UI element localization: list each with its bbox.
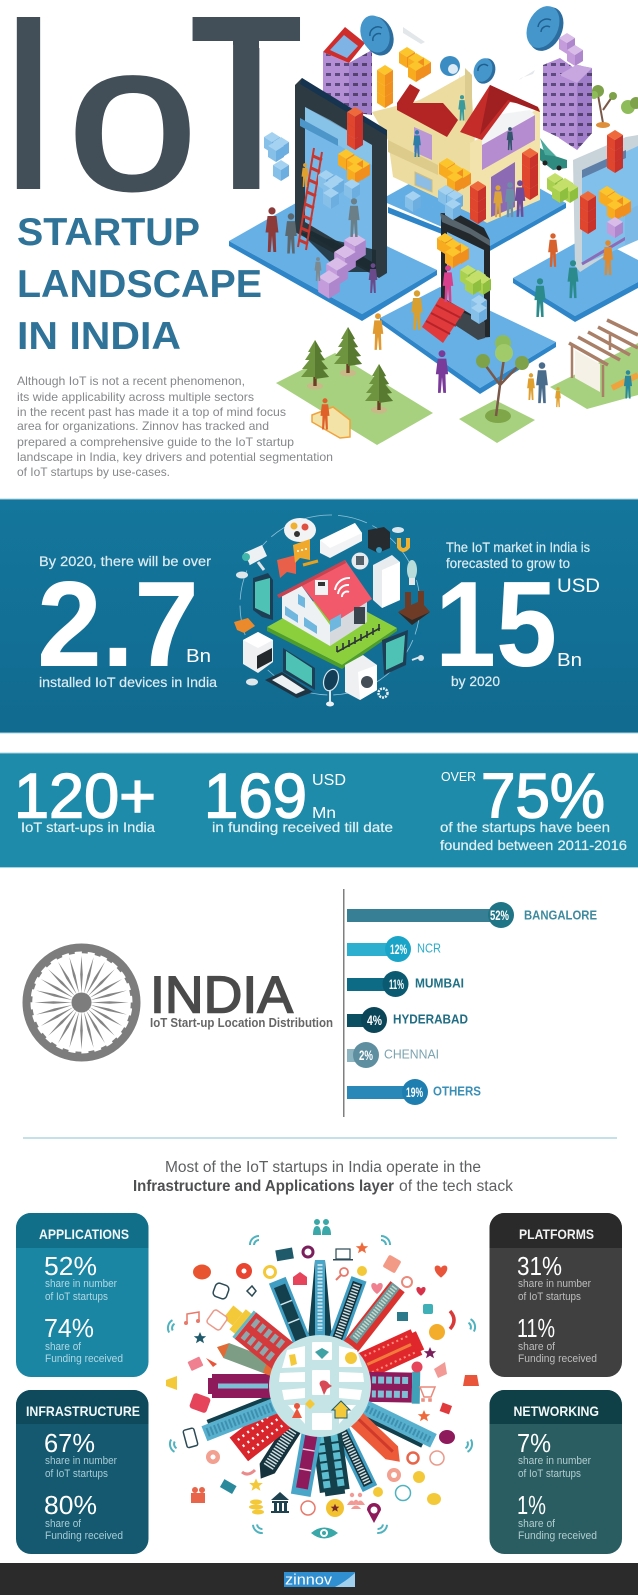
heading: tech stack layers: Infrastructure and Applications layer — [133, 1178, 394, 1195]
stat: 169 USD Mn: in funding received till date — [212, 819, 393, 835]
red ladder — [298, 148, 322, 250]
intro paragraph: landscape in India, key drivers and potential segmentation — [17, 450, 333, 464]
bench — [312, 407, 350, 438]
zinnov logo — [284, 1572, 355, 1588]
house — [277, 560, 380, 652]
panel: platforms: PLATFORMS — [519, 1226, 594, 1242]
intro paragraph — [17, 374, 333, 479]
bar: Others 19%: OTHERS — [433, 1084, 481, 1098]
panel: applications: 52% — [44, 1251, 97, 1281]
panel: applications: share in number — [45, 1278, 117, 1290]
bar: Chennai 2% — [347, 1042, 439, 1068]
bar: NCR 12%: 12% — [390, 941, 407, 957]
right screen — [573, 135, 638, 272]
bar: Mumbai 11%: 11% — [389, 976, 404, 992]
subtitle: startup landscape in India: IN INDIA — [17, 315, 181, 358]
icon: smart home with devices — [234, 515, 430, 706]
chart: location distribution bars — [343, 889, 597, 1117]
stat: over 75%: 75% — [481, 762, 605, 832]
subtitle: startup landscape in India: LANDSCAPE — [17, 263, 262, 306]
orbiting icons — [166, 1219, 479, 1538]
bar: Mumbai 11% — [347, 971, 464, 997]
bar: Bangalore 52%: 52% — [490, 907, 509, 923]
stat: 15 USD Bn market: forecasted to grow to — [446, 556, 570, 571]
teal car — [540, 138, 567, 170]
panel: networking: NETWORKING — [514, 1403, 599, 1419]
intro paragraph: Although IoT is not a recent phenomenon, — [17, 374, 245, 388]
yellow blocks — [338, 47, 631, 268]
panel: platforms: of IoT startups — [518, 1291, 581, 1303]
stat: 169 USD Mn: 169 — [204, 762, 307, 832]
subtitle: startup landscape in India — [17, 211, 262, 358]
bar: Hyderabad 4%: 4% — [367, 1012, 382, 1028]
stat: 2.7 Bn devices: 2.7 — [37, 556, 199, 692]
panel: applications — [16, 1213, 148, 1377]
stat: 120+: 120+ — [14, 762, 156, 832]
bar: Bangalore 52% — [347, 902, 597, 928]
panel: networking: 7% — [517, 1428, 551, 1458]
stat: over 75%: OVER — [441, 769, 476, 784]
panel: platforms: Funding received — [518, 1353, 597, 1365]
panel: applications: APPLICATIONS — [39, 1226, 129, 1242]
heading: India location distribution: IoT Start-up Location Distribution — [150, 1015, 333, 1030]
panel: applications: share of — [45, 1341, 82, 1353]
radial city illustration — [166, 1219, 479, 1538]
red columns — [347, 107, 623, 234]
stat: 2.7 Bn devices: Bn — [186, 646, 211, 666]
bar: NCR 12%: NCR — [417, 942, 441, 956]
bar: Hyderabad 4% — [347, 1007, 468, 1033]
bar: NCR 12% — [347, 936, 441, 962]
small trees top right — [590, 85, 638, 128]
heading: India location distribution: INDIA — [150, 966, 293, 1024]
panel: market stats band — [0, 498, 638, 734]
green blocks — [460, 173, 578, 295]
heading: tech stack layers: of the tech stack — [399, 1178, 513, 1195]
panel: platforms: 11% — [517, 1313, 555, 1343]
pine trees — [301, 327, 393, 414]
blue blocks — [264, 132, 623, 324]
bar: Others 19% — [347, 1079, 481, 1105]
panel: infrastructure: INFRASTRUCTURE — [26, 1403, 140, 1419]
heading: tech stack layers — [133, 1159, 513, 1195]
panel: networking: share in number — [518, 1455, 591, 1467]
left tablet — [295, 78, 387, 278]
panel: networking: 1% — [517, 1490, 546, 1520]
bar: Chennai 2%: 2% — [359, 1047, 373, 1063]
stat: 15 USD Bn market: 15 — [435, 556, 557, 692]
bar: Hyderabad 4%: HYDERABAD — [393, 1012, 468, 1026]
bar: Mumbai 11%: MUMBAI — [415, 976, 464, 990]
purple stairs — [318, 233, 366, 299]
stat: 15 USD Bn market: Bn — [557, 650, 582, 670]
stat: 169 USD Mn: USD — [312, 772, 346, 789]
wifi discs — [355, 1, 570, 87]
stat: 169 USD Mn — [204, 762, 393, 835]
people — [266, 95, 632, 430]
panel: infrastructure: 67% — [44, 1428, 95, 1458]
purple building left — [323, 27, 372, 115]
stat: 15 USD Bn market: The IoT market in India is — [446, 540, 590, 555]
panel: applications: 74% — [44, 1313, 94, 1343]
bar: Others 19%: 19% — [406, 1084, 423, 1100]
intro paragraph: of IoT startups by use-cases. — [17, 465, 170, 479]
intro paragraph: in the recent past has made it a top of mind focus — [17, 405, 286, 419]
intro paragraph: prepared a comprehensive guide to the IoT startup — [17, 435, 294, 449]
heading: India location distribution — [150, 966, 333, 1030]
stat: over 75%: of the startups have been — [440, 819, 610, 835]
intro paragraph: area for organizations. Zinnov has tracked and — [17, 419, 269, 433]
radial buildings — [200, 1260, 437, 1497]
stat: over 75% — [440, 762, 627, 853]
panel: infrastructure: Funding received — [45, 1530, 123, 1542]
bar: Bangalore 52%: BANGALORE — [524, 908, 597, 922]
panel: platforms — [490, 1213, 622, 1377]
deciduous tree — [476, 335, 529, 423]
device icons — [234, 518, 430, 706]
icon: Ashoka chakra — [26, 948, 136, 1058]
panel: infrastructure: share in number — [45, 1455, 117, 1467]
panel: networking: Funding received — [518, 1530, 597, 1542]
centre phone — [440, 213, 490, 340]
title: IoT — [0, 0, 306, 243]
purple building right — [543, 33, 592, 150]
bar: Chennai 2%: CHENNAI — [384, 1048, 439, 1062]
stat: 15 USD Bn market: USD — [557, 576, 600, 597]
panel: networking: of IoT startups — [518, 1468, 581, 1480]
white roof roll — [413, 74, 460, 111]
panel: platforms: share in number — [518, 1278, 591, 1290]
panel: infrastructure: share of — [45, 1518, 82, 1530]
house — [372, 68, 540, 223]
panel: platforms: share of — [518, 1341, 556, 1353]
panel: infrastructure: 80% — [44, 1490, 97, 1520]
stat: 169 USD Mn: Mn — [312, 805, 336, 822]
grass plots — [276, 343, 638, 445]
panel: networking: share of — [518, 1518, 556, 1530]
intro paragraph: its wide applicability across multiple sectors — [17, 390, 254, 404]
stat: 2.7 Bn devices: installed IoT devices in India — [39, 675, 218, 690]
house base — [267, 592, 397, 665]
panel: infrastructure: of IoT startups — [45, 1468, 108, 1480]
blue platforms — [229, 150, 638, 394]
panel: networking — [490, 1390, 622, 1554]
panel: applications: Funding received — [45, 1353, 123, 1365]
globe — [269, 1335, 371, 1437]
isometric smart city illustration — [229, 1, 638, 445]
stat: 2.7 Bn devices: By 2020, there will be over — [39, 554, 212, 569]
panel: applications: of IoT startups — [45, 1291, 108, 1303]
stat: over 75%: founded between 2011-2016 — [440, 837, 627, 853]
title: IoT: o — [68, 3, 197, 232]
stat: 120+: IoT start-ups in India — [21, 819, 155, 835]
panel: infrastructure — [16, 1390, 148, 1554]
zinnov logo: zinnov — [285, 1572, 333, 1588]
heading: tech stack layers: Most of the IoT startups in India operate in the — [165, 1159, 481, 1176]
red stairs — [422, 297, 465, 343]
subtitle: startup landscape in India: STARTUP — [17, 211, 200, 254]
panel: platforms: 31% — [517, 1251, 562, 1281]
stat: 15 USD Bn market: by 2020 — [451, 674, 500, 689]
pergola — [569, 320, 638, 397]
footer bar — [0, 1563, 638, 1595]
panel: startup stats band — [0, 752, 638, 868]
